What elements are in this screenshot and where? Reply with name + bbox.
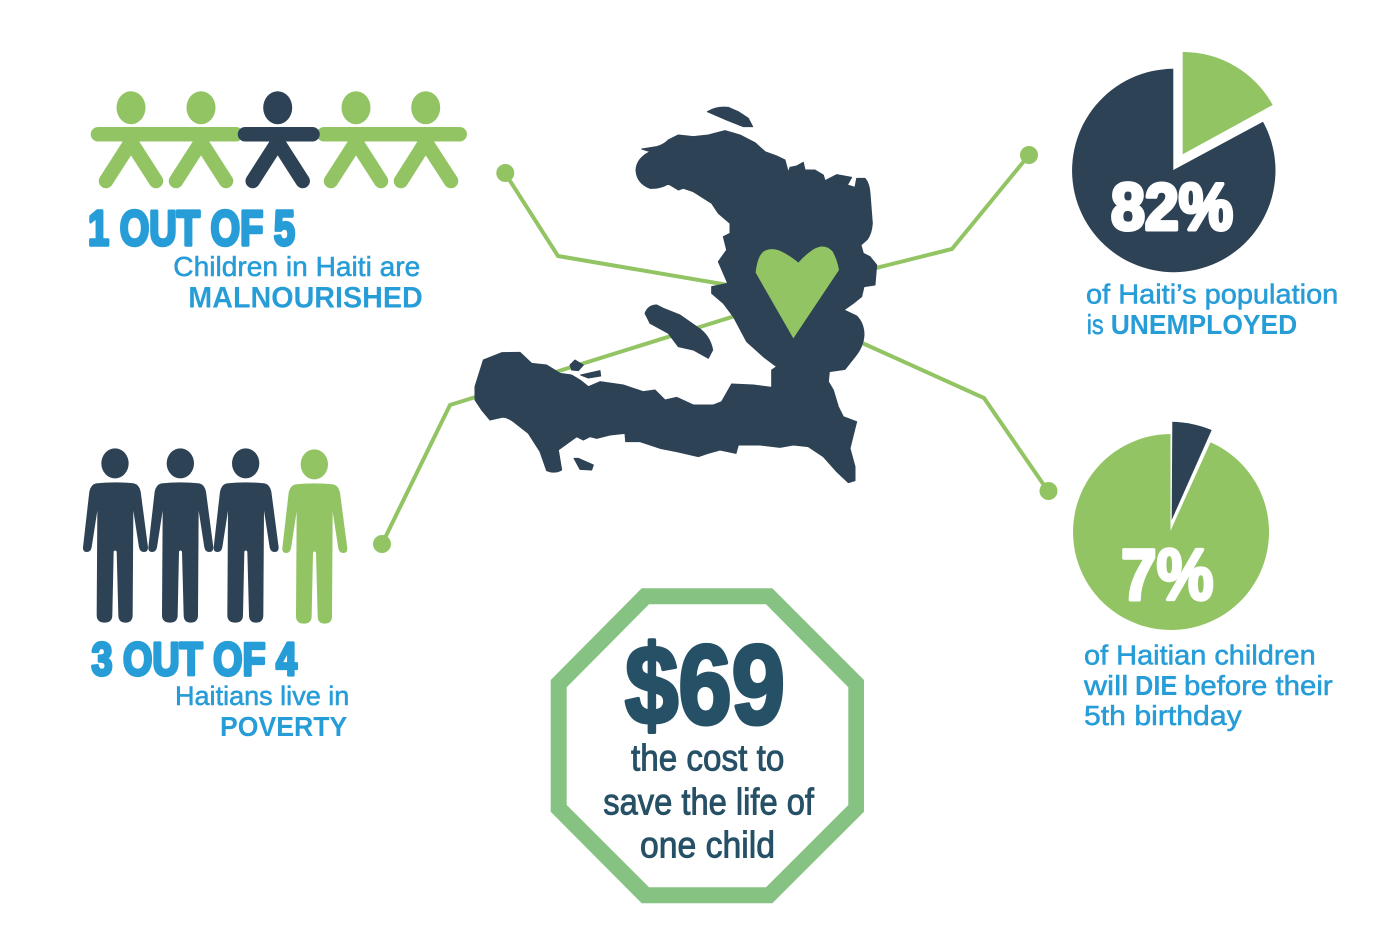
text: poverty: POVERTY bbox=[220, 711, 348, 742]
text: save the life of: save the life of bbox=[603, 781, 815, 822]
text: children in Haiti: Children in Haiti are bbox=[173, 251, 420, 282]
pie chart: 7% bbox=[1073, 422, 1269, 630]
stat heading: 1 OUT OF 5 bbox=[88, 202, 295, 256]
panel: 7% die bbox=[1073, 422, 1333, 731]
text: unemployed: UNEMPLOYED bbox=[1111, 309, 1297, 340]
map: Gonave island bbox=[645, 305, 713, 358]
text: will die: DIE bbox=[1135, 670, 1177, 701]
icon: four people bbox=[83, 448, 347, 624]
text: birthday: 5th birthday bbox=[1084, 700, 1242, 731]
value: $69: $69 bbox=[625, 622, 785, 748]
stat heading: 3 OUT OF 4 bbox=[92, 633, 297, 685]
map of Haiti bbox=[475, 107, 877, 483]
value: 82%: 82% bbox=[1111, 170, 1233, 244]
text: malnourished: MALNOURISHED bbox=[188, 281, 423, 314]
text: Haitians live in: Haitians live in bbox=[175, 681, 349, 711]
panel: 1 out of 5 bbox=[88, 91, 460, 314]
connector lines bbox=[373, 146, 1058, 553]
text: unemployed: is bbox=[1087, 309, 1104, 340]
connector: unemployed bbox=[872, 146, 1038, 269]
value: 7%: 7% bbox=[1121, 536, 1214, 616]
connector: poverty bbox=[373, 316, 735, 553]
map: mainland bbox=[475, 131, 877, 483]
icon: row of children bbox=[98, 91, 460, 181]
icon: heart bbox=[756, 246, 839, 338]
text: the cost to: the cost to bbox=[631, 738, 784, 779]
panel: $69 octagon bbox=[551, 588, 864, 903]
map: Tortuga island bbox=[707, 107, 753, 127]
panel: 82% unemployed bbox=[1072, 52, 1338, 340]
octagon frame bbox=[551, 588, 864, 903]
text: of Haitian children: of Haitian children bbox=[1084, 640, 1316, 670]
text: will die bbox=[1083, 670, 1333, 701]
text: will die: before their bbox=[1184, 670, 1333, 701]
text: will die: will bbox=[1083, 670, 1128, 701]
connector: malnourished bbox=[496, 164, 728, 285]
panel: 3 out of 4 bbox=[83, 448, 349, 742]
pie chart: 82% bbox=[1072, 52, 1275, 272]
text: population: of Haiti’s population bbox=[1086, 278, 1338, 309]
map: small islands bbox=[570, 360, 601, 470]
connector: child mortality bbox=[860, 342, 1058, 500]
text: one child: one child bbox=[640, 825, 775, 866]
